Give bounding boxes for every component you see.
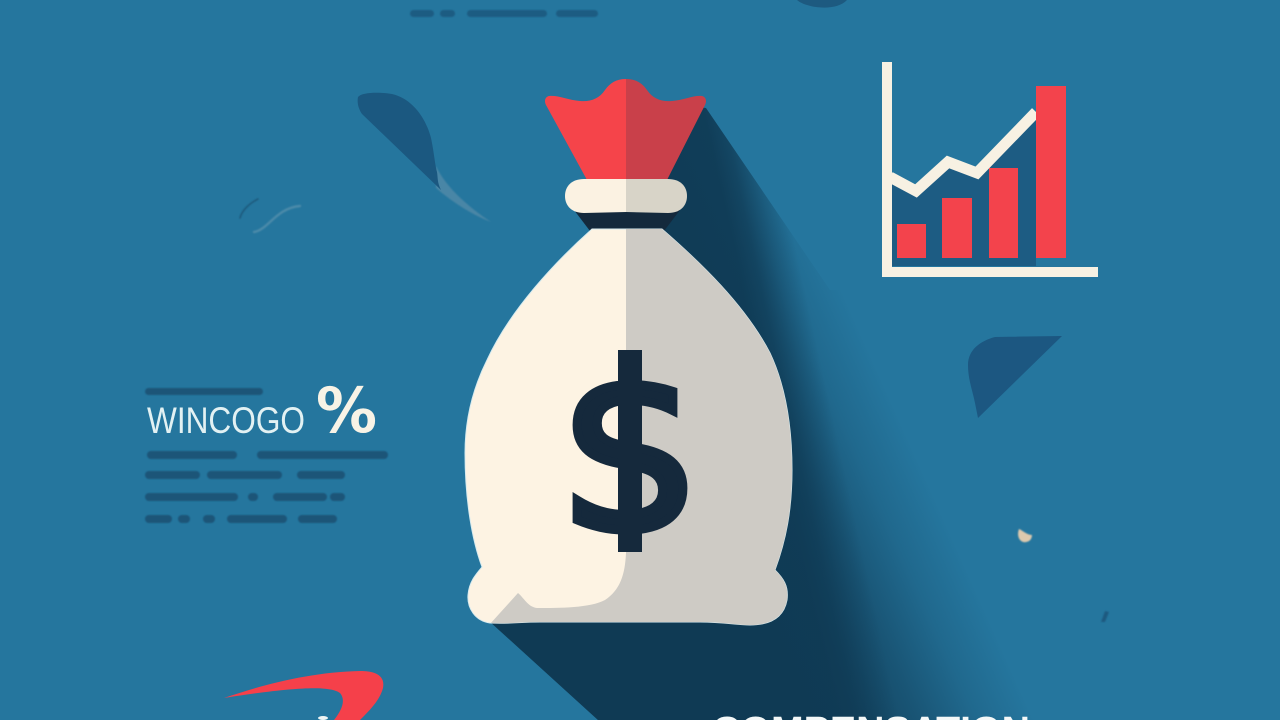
flap left [545,79,626,180]
chart bar 3 [989,168,1018,258]
block top bar [145,388,263,395]
right dark leaf [968,336,1062,418]
cream crumb [1018,529,1032,542]
bar and line chart [882,62,1098,277]
tie right [626,179,687,213]
chart axes [882,62,1098,277]
white fragment, bottom left [318,716,328,720]
chart shaded area [892,112,1036,266]
chart bar 4 [1036,86,1066,258]
block label: WINCOGO [147,400,305,441]
top blob icon [797,0,847,8]
placeholder lines [145,451,388,523]
chart bar 2 [942,198,972,258]
left text block [145,374,388,523]
chart bar 1 [897,224,926,258]
money bag [465,79,800,630]
infographic canvas [144,0,1109,720]
dollar sign [572,350,688,552]
chart trend line [890,112,1036,191]
bag shaded side [490,225,800,630]
tie left [565,179,626,213]
percent sign: % [316,374,377,447]
bag body [465,229,792,625]
dollar sign: $ [558,322,702,584]
top placeholder text bars [410,10,598,17]
decorative dark leaf, upper left [358,93,491,222]
flap right [626,79,706,180]
long shadow of money bag [492,108,1004,720]
small dark mark [1101,611,1109,622]
faint squiggle icon [240,199,300,232]
bag neck band [574,210,680,231]
red swoosh [224,671,383,720]
